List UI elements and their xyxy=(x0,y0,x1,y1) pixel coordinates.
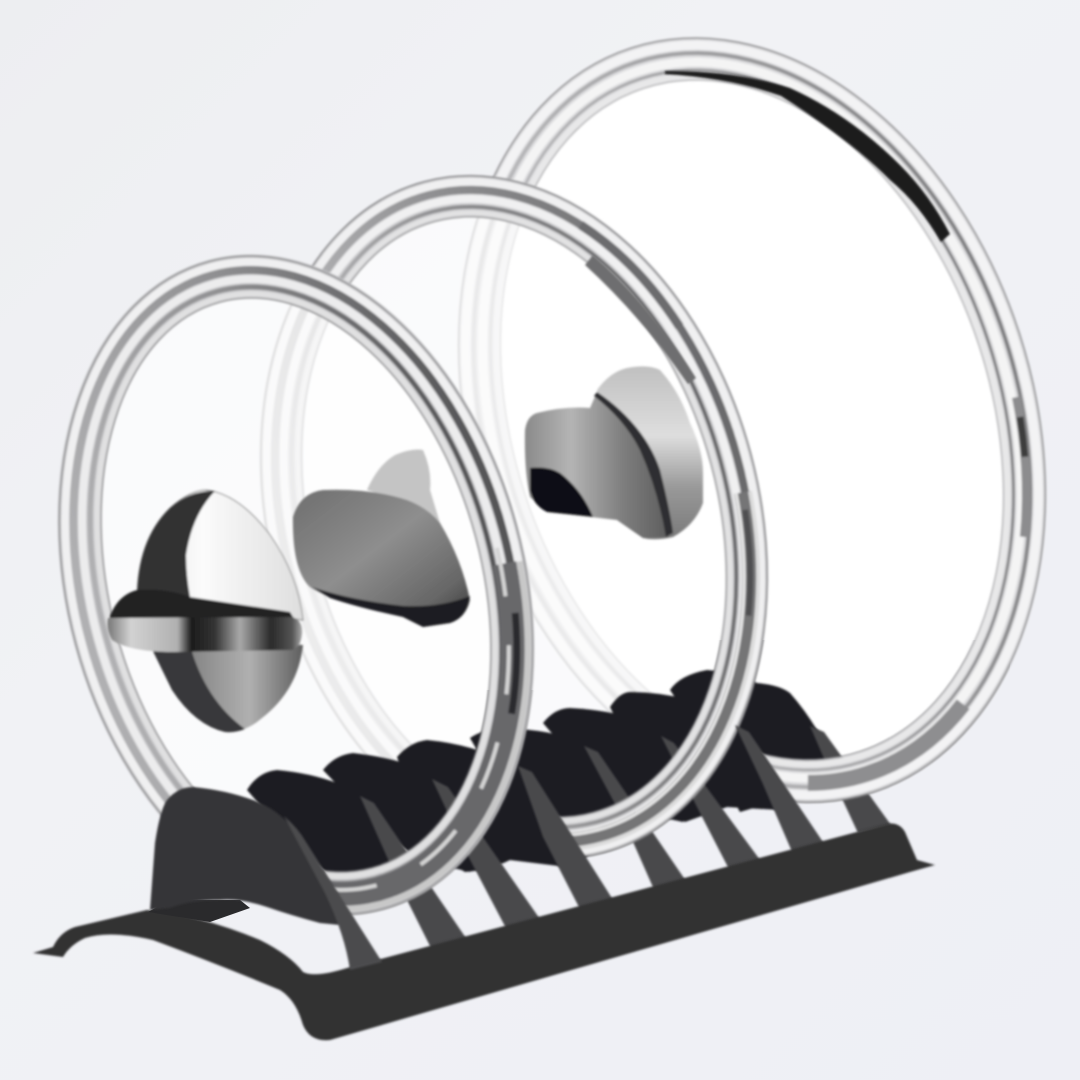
middle lid grey rim reflection xyxy=(585,255,696,384)
large lid glass xyxy=(365,0,1080,877)
small lid rim bottom xyxy=(324,690,534,916)
large lid knob xyxy=(525,366,703,539)
rack base rail xyxy=(33,824,935,1040)
middle lid rim bottom xyxy=(558,640,765,858)
large lid dark rim reflection xyxy=(665,71,950,242)
knob dome upper xyxy=(137,490,303,620)
rack rear support xyxy=(148,900,250,922)
large lid rim bottom xyxy=(762,640,1010,804)
front rib xyxy=(284,816,382,970)
rack front fin xyxy=(150,787,382,970)
small lid glass xyxy=(0,204,602,966)
small lid rim xyxy=(0,202,603,968)
rack back fins xyxy=(247,670,840,885)
middle lid knob xyxy=(293,450,470,627)
middle lid rim xyxy=(188,118,840,916)
small lid knob xyxy=(108,490,303,732)
rack front ribs xyxy=(518,725,825,913)
middle lid glass xyxy=(189,120,839,914)
large lid rim xyxy=(364,0,1080,879)
knob dark crescent xyxy=(137,491,215,600)
rack back ribs xyxy=(360,726,891,954)
knob handle back xyxy=(110,590,296,622)
knob dome lower xyxy=(150,645,303,732)
knob handle front xyxy=(108,617,302,652)
